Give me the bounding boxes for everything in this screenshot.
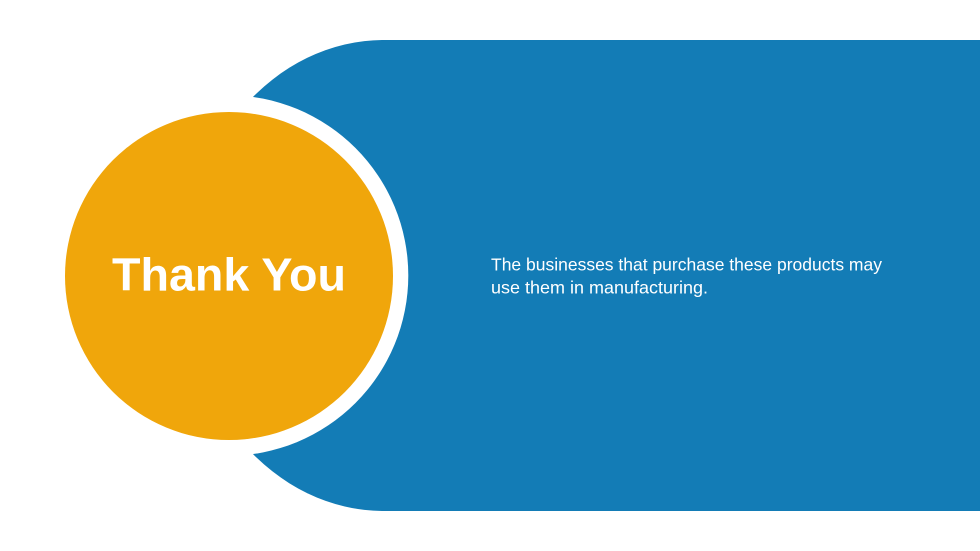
orange circle xyxy=(65,112,393,440)
heading: Thank You: Thank You xyxy=(112,248,346,300)
text block: description: The businesses that purchase these products may xyxy=(491,254,882,274)
panel: blue rounded background xyxy=(183,40,980,511)
text block: description xyxy=(491,254,882,298)
white ring around circle xyxy=(48,95,408,456)
text block: description: use them in manufacturing. xyxy=(491,278,708,298)
